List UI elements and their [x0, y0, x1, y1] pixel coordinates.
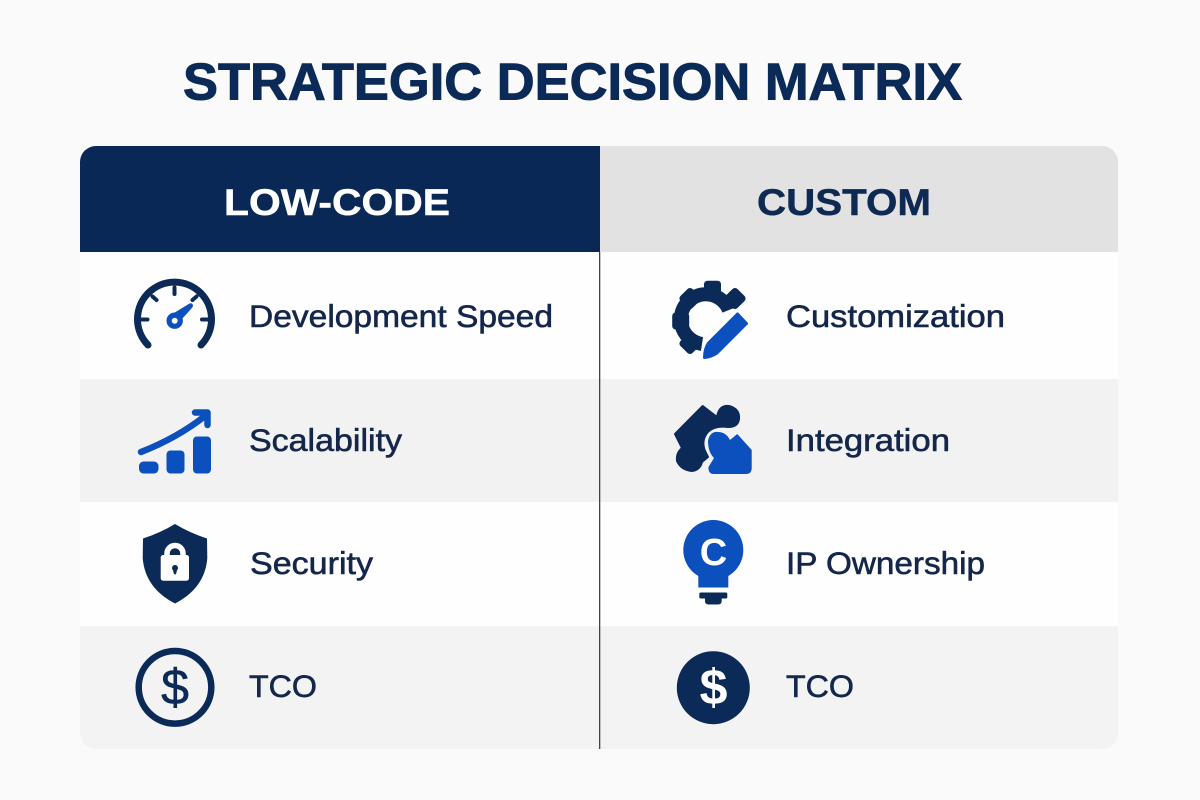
label: integration: Integration — [786, 422, 950, 458]
panel: decision matrix table — [80, 146, 1118, 749]
label: tco low-code: TCO — [249, 668, 317, 704]
label: development speed: Development Speed — [249, 298, 553, 334]
icon: dollar coin solid — [677, 651, 750, 724]
heading: low-code column: LOW-CODE — [224, 182, 450, 223]
icon: dollar coin solid: $ — [700, 660, 728, 716]
label: tco custom: TCO — [786, 668, 854, 704]
icon: growth chart with arrow — [139, 412, 211, 474]
icon: security shield with lock — [143, 524, 207, 604]
label: security: Security — [250, 545, 373, 581]
icon: lightbulb with c — [683, 520, 743, 604]
icon: dollar coin outline: $ — [161, 659, 189, 715]
icon: dollar coin outline — [139, 651, 211, 724]
icon: lightbulb with c: C — [700, 532, 727, 574]
label: customization: Customization — [786, 298, 1005, 334]
icon: puzzle pieces — [675, 406, 752, 474]
icon: speedometer gauge — [138, 282, 212, 345]
icon: gear with pencil — [672, 281, 747, 358]
heading: custom column: CUSTOM — [757, 182, 931, 223]
title: STRATEGIC DECISION MATRIX — [183, 54, 962, 112]
label: scalability: Scalability — [249, 422, 402, 458]
label: ip ownership: IP Ownership — [786, 545, 985, 581]
